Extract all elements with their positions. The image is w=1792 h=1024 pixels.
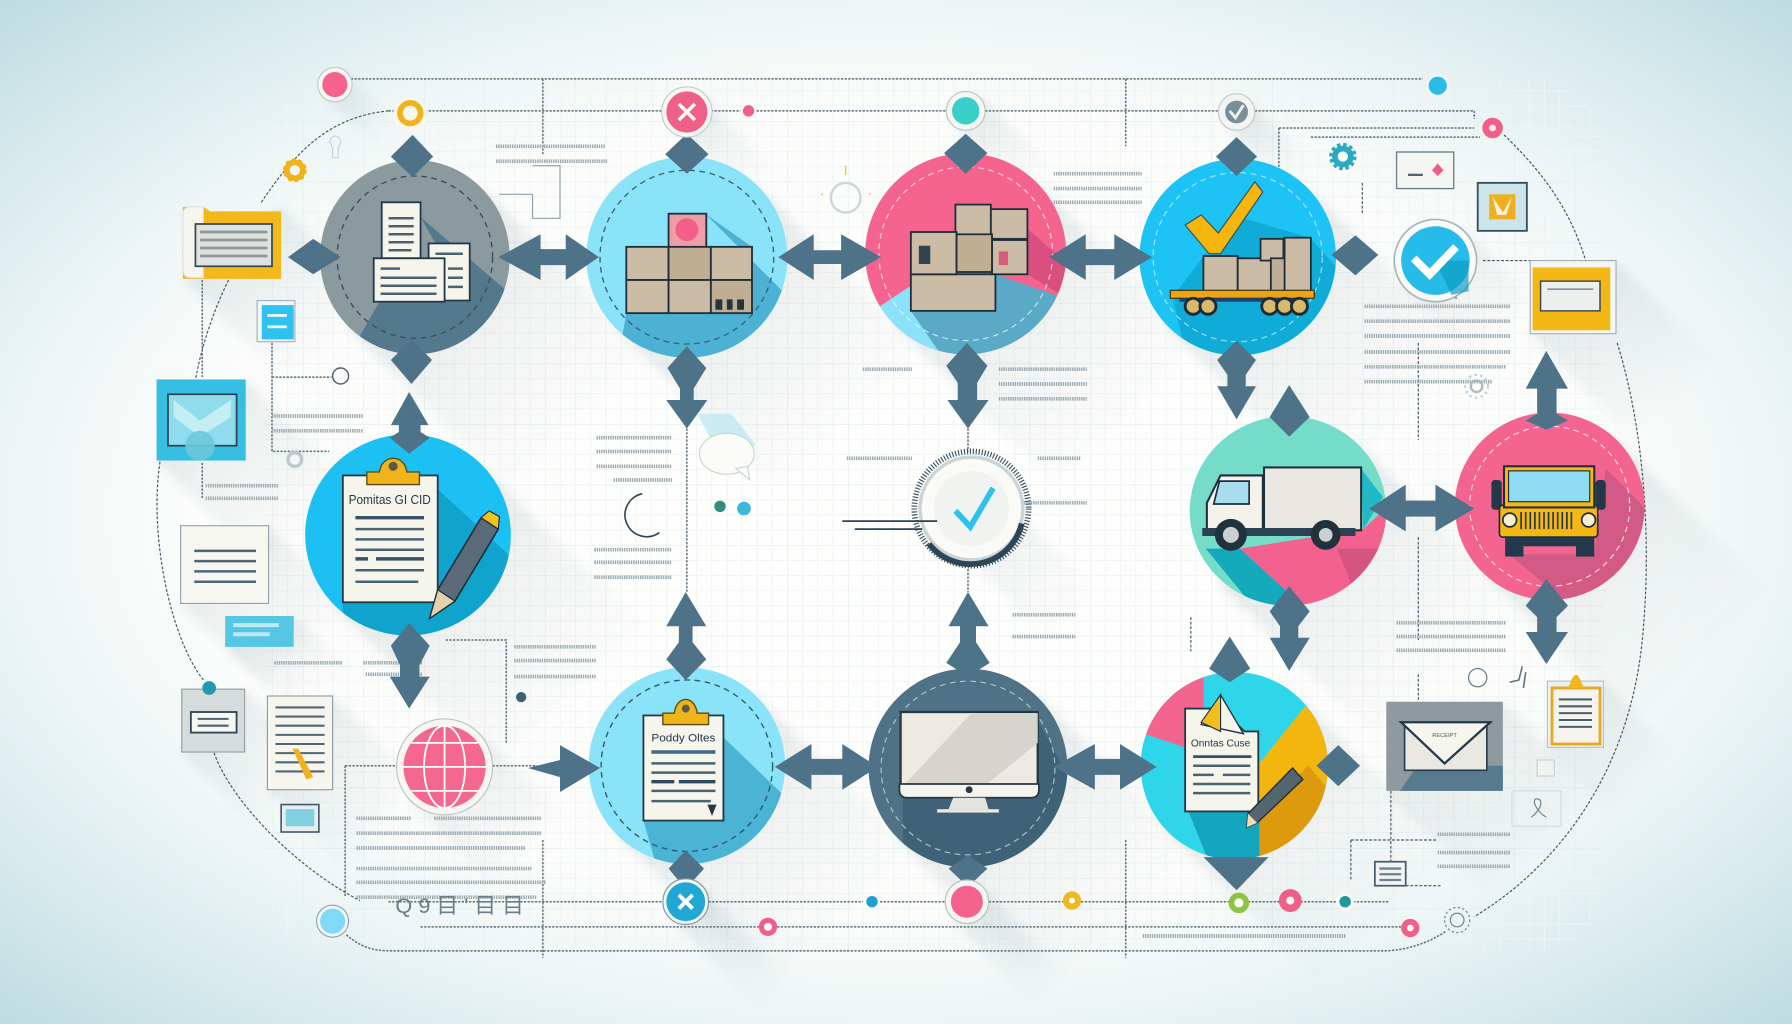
node 10: multicolour document [1141, 672, 1328, 858]
icon: faint bulb [821, 166, 871, 213]
marker: pink rosette [1279, 889, 1302, 912]
marker: large pink [945, 880, 989, 923]
icon: small monitor [281, 805, 319, 832]
marker: small pink [743, 105, 754, 117]
marker: gray check [1218, 94, 1255, 130]
marker: reject [662, 87, 712, 137]
marker: teal [946, 91, 985, 130]
arrow: globe to node 8 [528, 745, 600, 792]
icon: yellow folder [183, 207, 281, 279]
icon: blue mail panel [157, 379, 246, 461]
icon: faint gear [1465, 375, 1488, 398]
icon: teal gear [1331, 145, 1355, 169]
arrow: node 6 to node 7 [1369, 485, 1474, 531]
arrow: node 1 to node 2 [498, 234, 599, 280]
status markers [202, 67, 1503, 937]
arrow: node 7 up [1526, 351, 1568, 430]
icon: yellow tile [1530, 261, 1616, 334]
arrow: node 2 top marker [665, 134, 709, 174]
arrow: node 4 down [1217, 341, 1256, 419]
marker: small pink ring [759, 918, 777, 936]
icon: outline refresh ring [625, 494, 659, 537]
arrow: node 10 top marker [1209, 637, 1250, 682]
icon: gray card [182, 689, 245, 752]
arrow: node 1 top marker [391, 135, 433, 177]
icon: small faint tile [1512, 760, 1561, 826]
icon: flatbed with parcels [1170, 238, 1314, 314]
icon: pencil [430, 511, 499, 618]
background grid [265, 80, 1605, 951]
icon: gray envelope tile: RECEIPT [1432, 733, 1457, 739]
marker: dark dot [516, 692, 526, 702]
arrow: up to node 1 [390, 392, 430, 454]
icon: desktop monitor [899, 712, 1039, 813]
side icons left [157, 136, 560, 832]
side icons right [1331, 145, 1616, 886]
node 7: pink truck front [1455, 413, 1651, 606]
icon: stacked documents [374, 202, 470, 302]
arrow: node 1 left marker [288, 239, 341, 274]
node 6: teal and pink box truck [1190, 418, 1386, 605]
arrow: node 2 to node 3 [778, 234, 881, 280]
node 5: clipboard with pencil [305, 434, 514, 640]
centre icons [395, 166, 1029, 918]
marker: bottom-left blue [317, 905, 349, 937]
icon: speech bubble [697, 414, 757, 480]
icon: outline box [499, 166, 560, 218]
arrow: node 4 top marker [1216, 137, 1257, 176]
node 1: gray documents [320, 160, 514, 366]
marker: small blue [866, 896, 878, 907]
icon: blue check badge [1394, 219, 1477, 302]
icon: small calendar [1375, 862, 1406, 886]
node 3: pink and blue boxes [865, 155, 1066, 354]
icon: clipboard order: Poddy Oltes [651, 733, 716, 745]
icon: page with marker [267, 696, 333, 790]
marker: yellow [393, 97, 427, 131]
placeholder text lines [206, 146, 1511, 936]
marker: top-left pink [318, 67, 352, 102]
icon: box truck [1202, 467, 1361, 551]
icon: yellow tick [1185, 182, 1263, 254]
marker: teal small [1336, 893, 1354, 911]
icon: faint key outline [330, 136, 341, 158]
marker: outline gear [1445, 907, 1470, 933]
arrow: node 7 down [1526, 579, 1568, 664]
icon: small yellow clipboard [1547, 675, 1603, 747]
connector arrows [288, 134, 1568, 890]
arrow: node 5 down [390, 623, 430, 709]
arrow: node 1 bottom marker [391, 339, 432, 384]
node 2: light blue boxes [586, 158, 788, 358]
icon: picture tile [1478, 183, 1527, 231]
node 4: bright blue loaded flatbed [1139, 159, 1343, 366]
icon: small outline rings [1469, 666, 1526, 688]
marker: top-right blue [1426, 74, 1449, 97]
icon: pink globe [397, 719, 493, 815]
icon: clipboard form: Pomitas GI CID [349, 493, 431, 507]
icon: document with pencil: Onntas Cuse [1191, 738, 1251, 749]
icon: stacked parcels [626, 214, 752, 313]
arrow: node 3 down [946, 343, 989, 429]
arrow: node 10 right marker [1317, 745, 1360, 786]
arrow: node 2 down [666, 346, 707, 429]
marker: yellow gear [1063, 891, 1081, 910]
icon: clipboard order [643, 699, 723, 821]
marker: blue cross [663, 879, 709, 925]
icon: outline gear [288, 368, 349, 466]
arrow: node 6 top marker [1270, 385, 1310, 437]
arrow: node 3 top marker [944, 134, 987, 174]
arrow: node 8 bottom marker [669, 850, 704, 889]
icon: small gears [714, 501, 751, 515]
dashed connector network [157, 79, 1646, 958]
marker: small pink tag [1482, 118, 1503, 138]
icon: central approval dial [842, 451, 1029, 566]
icon: clipboard form [343, 458, 438, 602]
arrow: node 9 bottom marker [949, 855, 987, 887]
icon: message card [1397, 152, 1454, 189]
node 8: light blue clipboard [589, 667, 789, 869]
icon: gray envelope tile [1386, 702, 1503, 791]
marker: green [1229, 893, 1249, 913]
icon: glyph row: Q 9 目 ' 目 目 [395, 893, 524, 918]
arrow: node 8 to node 9 [775, 744, 878, 790]
icon: yellow truck front [1491, 466, 1606, 557]
icon: parcels [911, 205, 1027, 311]
arrow: node 6 down [1270, 586, 1310, 671]
icon: document with pencil [1185, 695, 1303, 827]
icon: blue card [225, 616, 294, 647]
arrow: node 3 to node 4 [1049, 234, 1152, 280]
marker: teal on gray card [202, 681, 216, 695]
icon: white document [181, 526, 269, 603]
marker: pink pin [1401, 919, 1419, 937]
arrow: node 9 to node 10 [1054, 744, 1157, 790]
icon: blue note card [257, 301, 295, 342]
arrow: node 4 right marker [1331, 235, 1378, 275]
arrow: node 8 up [666, 592, 706, 680]
node 9: dark monitor [869, 669, 1074, 869]
icon: yellow gear [284, 159, 306, 181]
arrow: node 10 bottom marker [1203, 857, 1269, 890]
arrow: node 9 up [946, 592, 990, 677]
